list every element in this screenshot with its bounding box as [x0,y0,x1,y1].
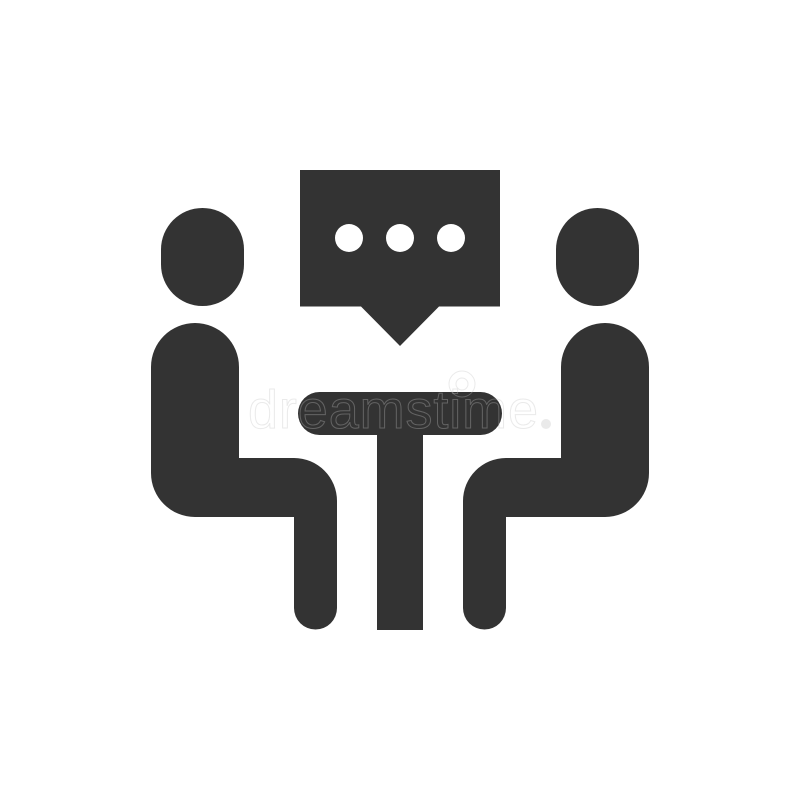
watermark [248,371,551,440]
speech bubble dots [335,224,465,252]
icon: speech bubble [300,170,500,346]
right person head [556,208,639,306]
left person body [151,323,337,630]
watermark spiral [449,371,475,397]
icon: table [298,392,502,630]
speech bubble shape [300,170,500,346]
right person body [463,323,649,630]
icon: left person [151,208,337,630]
watermark dot [541,419,551,429]
left person head [161,208,244,306]
table leg [377,420,423,630]
watermark text: dreamstime [248,380,538,440]
table top [298,392,502,435]
icon: right person [463,208,649,630]
